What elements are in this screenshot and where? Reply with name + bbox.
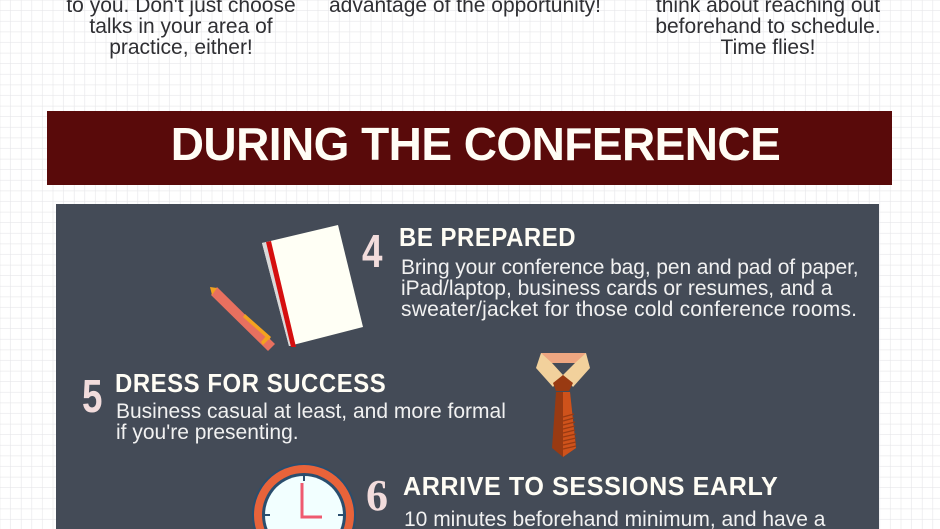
item 5 bbox=[82, 368, 506, 444]
text block: choose talks bbox=[66, 0, 296, 59]
heading: be prepared: BE PREPARED bbox=[399, 222, 576, 252]
section banner: during the conference: DURING THE CONFERENCE bbox=[171, 118, 780, 170]
description: be prepared: iPad/laptop, business cards or resumes, and a bbox=[401, 277, 832, 300]
description: be prepared: sweater/jacket for those cold conference rooms. bbox=[401, 298, 857, 321]
description: dress for success: Business casual at least, and more formal bbox=[116, 400, 506, 423]
section banner: during the conference bbox=[47, 111, 892, 185]
number 6: 6 bbox=[366, 471, 388, 520]
number 4: 4 bbox=[362, 225, 382, 277]
text block: schedule: Time flies! bbox=[721, 36, 815, 59]
number 5: 5 bbox=[82, 370, 102, 422]
description: be prepared bbox=[401, 256, 859, 321]
text block: choose talks: practice, either! bbox=[109, 36, 253, 59]
item 6 bbox=[366, 471, 826, 529]
item 4 bbox=[362, 222, 859, 321]
text block: choose talks: talks in your area of bbox=[89, 15, 273, 38]
panel: conference tips bbox=[56, 204, 879, 529]
heading: arrive to sessions early: ARRIVE TO SESSIONS EARLY bbox=[403, 471, 778, 501]
icon: clock bbox=[252, 463, 356, 529]
icon: tie bbox=[536, 353, 590, 457]
description: dress for success bbox=[116, 400, 506, 444]
text block: schedule: beforehand to schedule. bbox=[655, 15, 881, 38]
icon: notebook and pen bbox=[210, 225, 363, 351]
text block: schedule bbox=[655, 0, 881, 59]
description: be prepared: Bring your conference bag, pen and pad of paper, bbox=[401, 256, 859, 279]
description: dress for success: if you're presenting. bbox=[116, 421, 299, 444]
heading: dress for success: DRESS FOR SUCCESS bbox=[115, 368, 386, 398]
